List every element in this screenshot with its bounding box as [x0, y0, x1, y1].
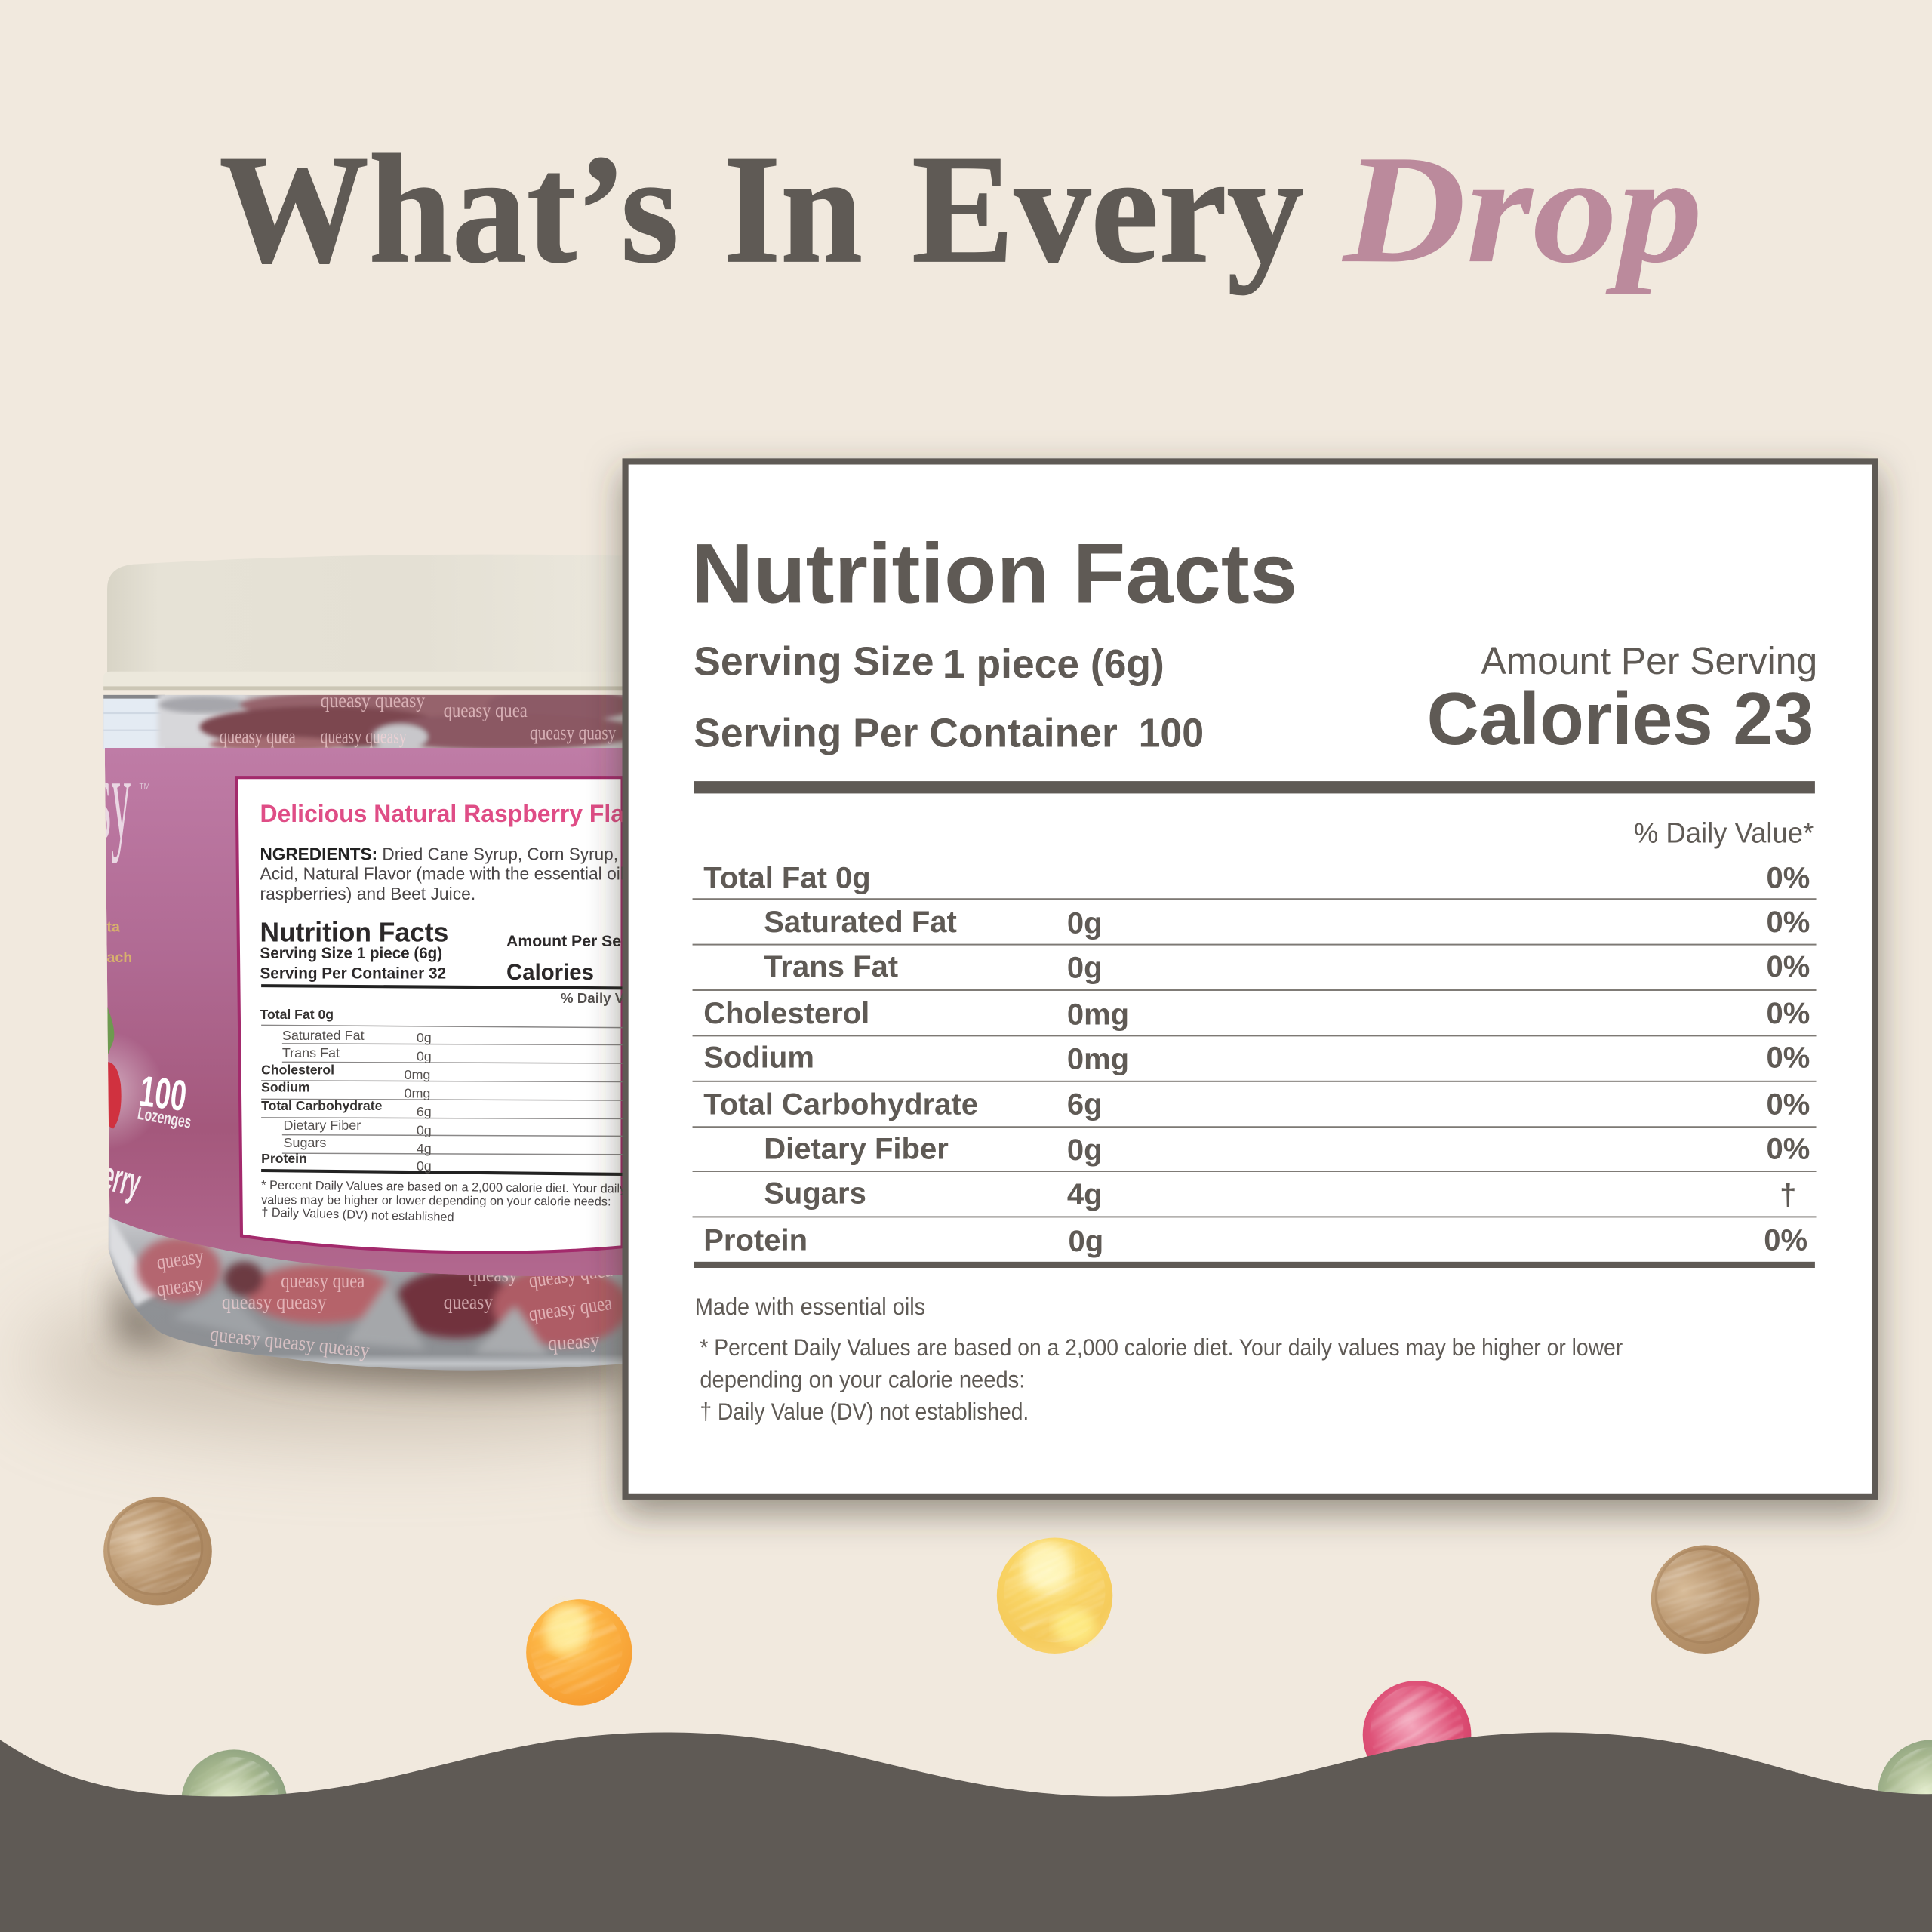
jar white nutrition panel: % Daily Value — [561, 990, 652, 1006]
glass bottom with candies: queasy — [468, 1263, 518, 1287]
title: In — [723, 124, 863, 295]
jar white nutrition panel: * Percent Daily Values are based on a 2,000 calorie diet. Your daily — [261, 1179, 626, 1196]
serving info — [694, 639, 1204, 755]
product jar — [25, 555, 764, 1435]
candy: green right — [1868, 1730, 1932, 1858]
jar white nutrition panel: 0mg — [405, 1067, 430, 1082]
jar white nutrition panel: values may be higher or lower depending on your calorie needs: — [261, 1193, 611, 1209]
jar brand lettering: TM — [139, 783, 150, 791]
jar white nutrition panel: Dietary Fiber — [284, 1118, 361, 1133]
nutrient table: 0g — [1069, 1225, 1103, 1258]
jar brand lettering: mach — [94, 949, 132, 966]
glass bottom with candies: queasy queasy queasy — [209, 1322, 371, 1362]
glass bottom with candies: queasy — [444, 1291, 493, 1314]
candy: pink — [1353, 1669, 1481, 1796]
jar brand lettering — [105, 782, 149, 962]
title: What’s — [220, 124, 679, 295]
candy: brown left — [98, 1490, 213, 1605]
jar lid — [103, 555, 622, 690]
jar white nutrition panel: raspberries) and Beet Juice. — [260, 884, 475, 903]
jar white nutrition panel: 4g — [417, 1141, 432, 1156]
candy: orange — [517, 1590, 636, 1709]
glass top with candies — [103, 694, 622, 749]
glass top with candies: queasy quea — [220, 724, 296, 748]
glass bottom with candies: queasy — [547, 1329, 601, 1355]
footnotes — [695, 1294, 1623, 1425]
jar white nutrition panel: 0g — [417, 1049, 432, 1064]
nutrient table: Total Carbohydrate — [703, 1088, 978, 1121]
calories: Amount Per Serving — [1481, 639, 1817, 682]
nutrient table: 6g — [1067, 1088, 1103, 1121]
nutrient table: 0% — [1767, 861, 1810, 894]
glass bottom with candies: queasy — [155, 1272, 205, 1301]
nutrient table — [693, 861, 1817, 1268]
glass top with candies: queasy quasy — [530, 721, 616, 745]
jar white nutrition panel — [236, 777, 662, 1253]
jar white nutrition panel: NGREDIENTS: Dried Cane Syrup, Corn Syrup, Citric — [260, 844, 662, 864]
jar shadow — [25, 1257, 764, 1435]
jar white nutrition panel: † Daily Values (DV) not established — [261, 1205, 454, 1224]
100 lozenges badge — [137, 1076, 191, 1129]
nutrition facts card: % Daily Value* — [1634, 817, 1814, 849]
nutrient table: 0% — [1767, 906, 1810, 939]
candy: green left — [172, 1740, 297, 1865]
nutrient table: 0% — [1764, 1223, 1807, 1257]
candy: brown right — [1645, 1538, 1760, 1654]
jar pink label — [104, 748, 622, 1276]
footnotes: * Percent Daily Values are based on a 2,000 calorie diet. Your daily values may be higher or lower — [700, 1334, 1623, 1361]
jar white nutrition panel: 0g — [417, 1123, 432, 1138]
nutrient table: 0% — [1767, 1133, 1810, 1166]
jar white nutrition panel: Serving Size 1 piece (6g) — [260, 945, 442, 962]
nutrient table: 0g — [1067, 1134, 1103, 1167]
glass bottom with candies: queasy quea — [281, 1269, 365, 1293]
footnotes: † Daily Value (DV) not established. — [700, 1398, 1029, 1425]
jar brand lettering: sy — [96, 732, 131, 863]
nutrient table: Cholesterol — [703, 997, 869, 1030]
nutrient table: Trans Fat — [764, 950, 898, 983]
footnotes: depending on your calorie needs: — [700, 1366, 1025, 1392]
nutrition facts card — [626, 461, 1875, 1497]
nutrient table: 0% — [1767, 950, 1810, 983]
nutrient table: 0g — [1067, 952, 1103, 985]
footnotes: Made with essential oils — [695, 1294, 925, 1320]
jar white nutrition panel: Calories — [506, 960, 594, 985]
bottom wave — [0, 1733, 1932, 1932]
100 lozenges badge: 100 — [137, 1067, 189, 1121]
nutrient table: † — [1780, 1179, 1796, 1212]
nutrient table: 0g — [1067, 907, 1103, 940]
icon: raspberry and leaf — [107, 1007, 157, 1143]
glass top with candies: queasy quea — [444, 699, 528, 722]
nutrient table: Sugars — [764, 1177, 866, 1210]
jar white nutrition panel: Saturated Fat — [282, 1028, 365, 1043]
glass top with candies: queasy queasy — [320, 689, 425, 712]
card heading: Nutrition Facts — [691, 525, 1297, 620]
nutrient table: 0mg — [1067, 1042, 1129, 1075]
calories — [1427, 639, 1817, 760]
nutrient table: 0% — [1767, 1088, 1810, 1121]
jar white nutrition panel: Sodium — [261, 1080, 310, 1095]
jar white nutrition panel: Nutrition Facts — [260, 916, 448, 947]
nutrient table: 0mg — [1067, 998, 1129, 1032]
glass top with candies: queasy queasy — [320, 724, 407, 748]
glass bottom with candies: queasy quea — [528, 1258, 614, 1293]
nutrient table: 0% — [1767, 1041, 1810, 1075]
jar white nutrition panel: Total Fat 0g — [260, 1007, 334, 1022]
jar white nutrition panel: 0g — [417, 1030, 432, 1045]
jar white nutrition panel: 6g — [417, 1104, 432, 1119]
jar white nutrition panel: 0mg — [405, 1086, 430, 1101]
nutrient table: Protein — [703, 1223, 808, 1257]
jar white nutrition panel: Acid, Natural Flavor (made with the essential oils of — [260, 864, 652, 884]
jar white nutrition panel: 0g — [417, 1158, 432, 1174]
jar white nutrition panel: Trans Fat — [282, 1045, 340, 1060]
calories: Calories 23 — [1427, 677, 1814, 760]
title: Drop — [1341, 124, 1703, 295]
serving info: 1 piece (6g) — [943, 641, 1164, 687]
serving info: Serving Size — [694, 639, 934, 685]
glass bottom with candies: queasy — [155, 1244, 205, 1275]
title — [220, 124, 1703, 295]
title: Every — [912, 124, 1303, 295]
jar pink label: berry — [87, 1150, 146, 1206]
jar white nutrition panel: Amount Per Serving — [506, 933, 660, 950]
glass bottom with candies: queasy quea — [528, 1291, 614, 1326]
nutrient table: Saturated Fat — [764, 906, 957, 939]
nutrient table: 4g — [1067, 1178, 1103, 1211]
nutrient table: Sodium — [703, 1041, 814, 1075]
serving info: Serving Per Container — [694, 710, 1118, 755]
glass bottom with candies — [99, 1208, 629, 1374]
serving info: 100 — [1139, 710, 1204, 755]
jar brand lettering: eta — [99, 918, 121, 935]
jar white nutrition panel: Serving Per Container 32 — [260, 964, 446, 982]
jar white nutrition panel: Cholesterol — [261, 1063, 334, 1078]
glass bottom with candies: queasy queasy — [222, 1291, 327, 1314]
jar white nutrition panel: Delicious Natural Raspberry Flavor — [260, 799, 662, 827]
100 lozenges badge: Lozenges — [136, 1103, 193, 1132]
nutrient table: 0% — [1767, 997, 1810, 1030]
jar white nutrition panel: Protein — [261, 1151, 307, 1166]
jar white nutrition panel: Sugars — [284, 1135, 326, 1150]
nutrient table: Dietary Fiber — [764, 1133, 949, 1166]
jar white nutrition panel: Total Carbohydrate — [261, 1098, 383, 1113]
candy: yellow — [988, 1524, 1122, 1659]
nutrient table: Total Fat 0g — [703, 861, 871, 894]
